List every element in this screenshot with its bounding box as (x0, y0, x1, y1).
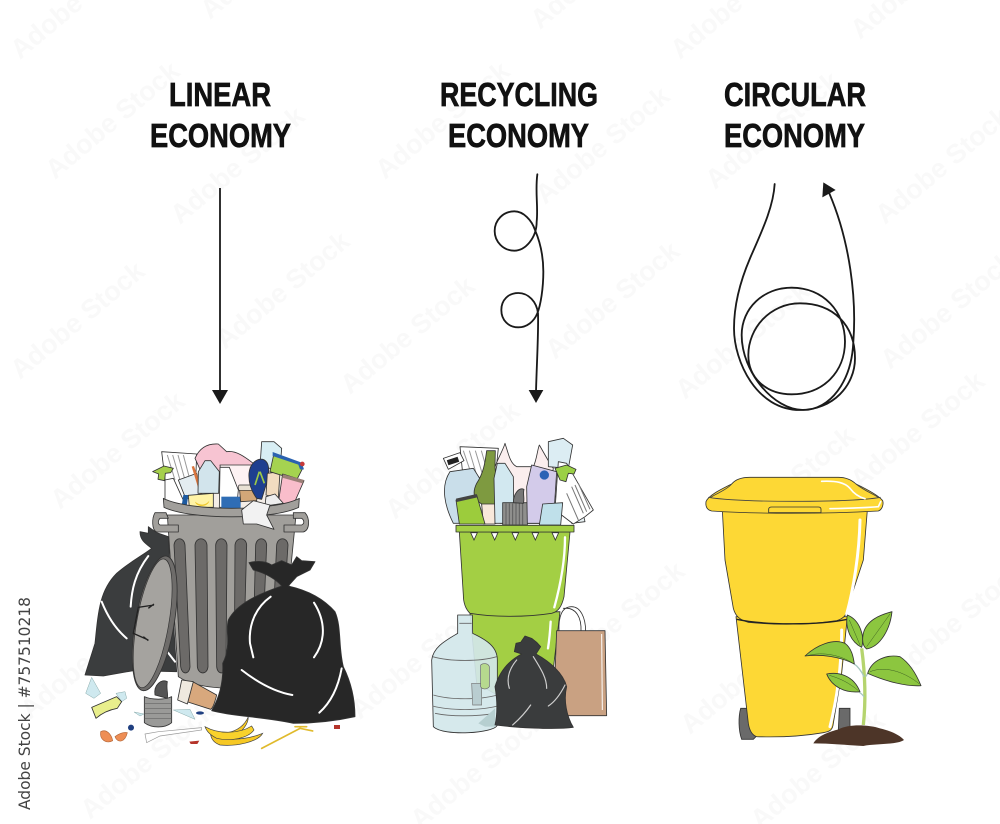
bin lower section (736, 617, 847, 737)
heading: circular economy: CIRCULAR (724, 76, 866, 113)
bottle cap (128, 725, 134, 731)
watermark pattern: Adobe Stock (530, 80, 676, 210)
leaf top right (863, 612, 892, 649)
white crumpled cloth (242, 501, 274, 529)
green bin upper section (456, 525, 574, 648)
arrow: linear straight arrow (212, 188, 228, 404)
watermark pattern: Adobe Stock (545, 555, 691, 685)
watermark pattern: Adobe Stock (700, 65, 846, 195)
empty tin can (144, 681, 172, 727)
bin lid (706, 477, 883, 513)
small litter (189, 725, 340, 744)
watermark pattern: Adobe Stock (5, 255, 151, 385)
egg shells (101, 731, 127, 742)
watermark pattern: Adobe Stock (715, 420, 861, 550)
back black bag (85, 527, 177, 676)
watermark pattern: Adobe Stock (165, 100, 311, 230)
bin wheels (739, 708, 850, 739)
front black bag (212, 557, 355, 723)
stock id text: Adobe Stock | #757510218 (15, 597, 34, 810)
watermark pattern: Adobe Stock (40, 55, 186, 185)
heading: linear economy: LINEAR (169, 76, 271, 113)
banana peel (205, 717, 263, 745)
heading: recycling economy: ECONOMY (448, 117, 589, 154)
arrow: circular looping arrow (734, 182, 855, 410)
soil (813, 725, 904, 746)
arrow: recycling looped arrow (495, 174, 543, 403)
fork (145, 728, 202, 743)
leaf top left (847, 615, 863, 647)
illustration: green recycling bin with bottles, bag and jug (432, 438, 607, 733)
watermark pattern: Adobe Stock (45, 385, 191, 515)
watermark pattern: Adobe Stock (75, 695, 221, 824)
bin upper section (722, 510, 867, 624)
stem (862, 648, 865, 725)
leaf right (868, 656, 921, 686)
plant with soil (805, 612, 921, 746)
illustration: overflowing grey trash can with bags and litter (85, 442, 355, 748)
heading: recycling economy (440, 76, 598, 154)
water jug (432, 615, 497, 733)
watermark pattern: Adobe Stock (380, 395, 526, 525)
small black bag (495, 636, 573, 728)
watermark pattern: Adobe Stock (540, 235, 686, 365)
brown paper bag (553, 607, 607, 716)
heading: recycling economy: RECYCLING (440, 76, 598, 113)
watermark pattern: Adobe Stock (370, 55, 516, 185)
bin highlights (830, 520, 860, 727)
straw (262, 727, 313, 748)
watermark pattern: Adobe Stock (335, 270, 481, 400)
glass shards (86, 677, 195, 719)
watermark pattern: Adobe Stock (345, 595, 491, 725)
watermark pattern: Adobe Stock (210, 225, 356, 355)
heading: circular economy (724, 76, 866, 154)
recyclable contents (443, 438, 593, 525)
heading: circular economy: ECONOMY (724, 117, 865, 154)
watermark pattern: Adobe Stock (670, 275, 816, 405)
leaf lower left (827, 673, 860, 692)
apple core (92, 697, 122, 718)
leaf left (805, 642, 854, 664)
watermark pattern: Adobe Stock (15, 595, 161, 725)
seam (737, 619, 847, 624)
watermark pattern: Adobe Stock (675, 610, 821, 740)
heading: linear economy: ECONOMY (150, 117, 291, 154)
green bin lower section (470, 612, 560, 697)
coffee cup on ground (178, 680, 217, 709)
heading: linear economy (150, 76, 291, 154)
illustration: yellow wheelie bin with plant (706, 477, 921, 746)
grey can body (153, 498, 309, 688)
watermark pattern: Adobe Stock (845, 365, 991, 495)
trash contents (153, 442, 305, 513)
can lid (124, 553, 186, 694)
